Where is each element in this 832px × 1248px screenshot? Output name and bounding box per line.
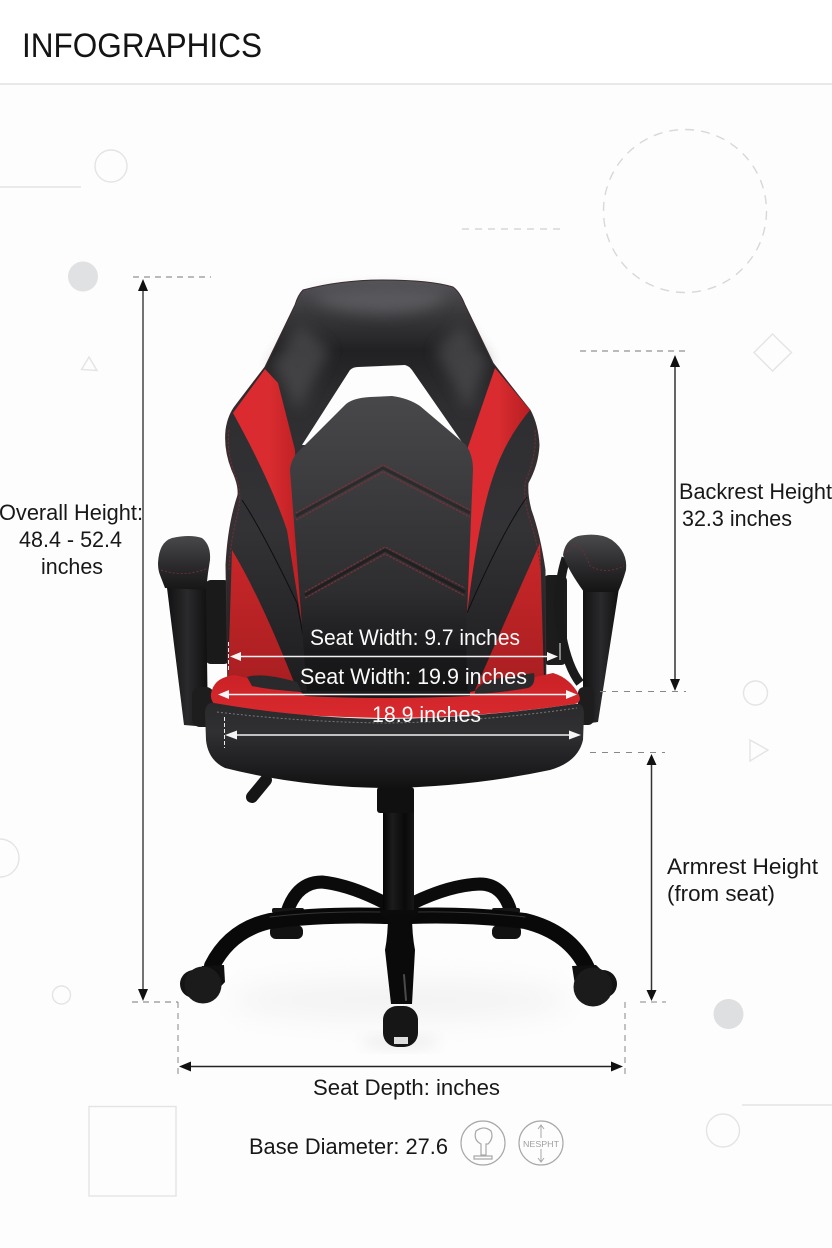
base diameter label: Base Diameter: 27.6 [249,1134,448,1159]
column collar [377,787,414,813]
chevron stitching [228,430,541,598]
icon: height arrows: NESPHT [523,1140,559,1149]
armrest height label: Armrest Height [667,854,818,879]
armrest height dimension [590,752,666,1002]
seat width dimension: cushion [218,690,577,699]
backrest window [302,365,464,445]
seat depth dimension [178,1002,625,1076]
left armrest pad [158,536,210,590]
icon: height arrows [519,1121,563,1165]
right arm post [543,558,619,725]
seat depth label: Seat Depth: inches [313,1075,500,1100]
overall height label [0,500,143,579]
center back pad [290,396,473,695]
left red panel [233,369,305,640]
seat dark inset left [247,675,302,692]
gas column [383,810,414,910]
seat cushion [205,703,584,788]
armrest height label [667,854,818,906]
seat dark center [300,691,470,698]
seat width label 19.9: Seat Width: 19.9 inches [300,664,527,689]
backrest height label: Backrest Height [679,479,832,504]
seat dark inset right [475,673,534,694]
left caster [180,965,225,1004]
chair floor shadow [230,980,570,1048]
right caster [572,965,617,1006]
seat front width label: 18.9 inches [372,702,481,727]
backrest height label [679,479,832,531]
headrest highlights [272,290,488,410]
seat width dimension: backrest [228,642,560,670]
front caster [383,1006,418,1047]
lower right red panel [475,543,544,690]
left arm post [167,580,230,727]
office chair [158,280,626,1047]
backrest height dimension [580,351,687,692]
overall height label: inches [41,554,103,579]
side seams [242,497,527,635]
armrest height label: (from seat) [667,881,775,906]
title: INFOGRAPHICS [22,27,262,65]
backrest height label: 32.3 inches [682,506,792,531]
lower left red panel [228,550,297,690]
right red panel [466,368,530,623]
height lever [252,780,266,797]
seat red top [211,673,580,718]
overall height label: Overall Height: [0,500,143,525]
seat stitching [217,708,577,723]
chair base with five legs [212,882,587,1004]
icon: tree on stand [461,1121,505,1165]
right armrest pad [563,535,626,592]
backrest shell [226,280,546,695]
header bar [0,0,832,84]
seat front width dimension [224,717,581,748]
overall height dimension [132,277,211,1002]
seat width label 9.7: Seat Width: 9.7 inches [310,625,520,650]
overall height label: 48.4 - 52.4 [19,527,122,552]
